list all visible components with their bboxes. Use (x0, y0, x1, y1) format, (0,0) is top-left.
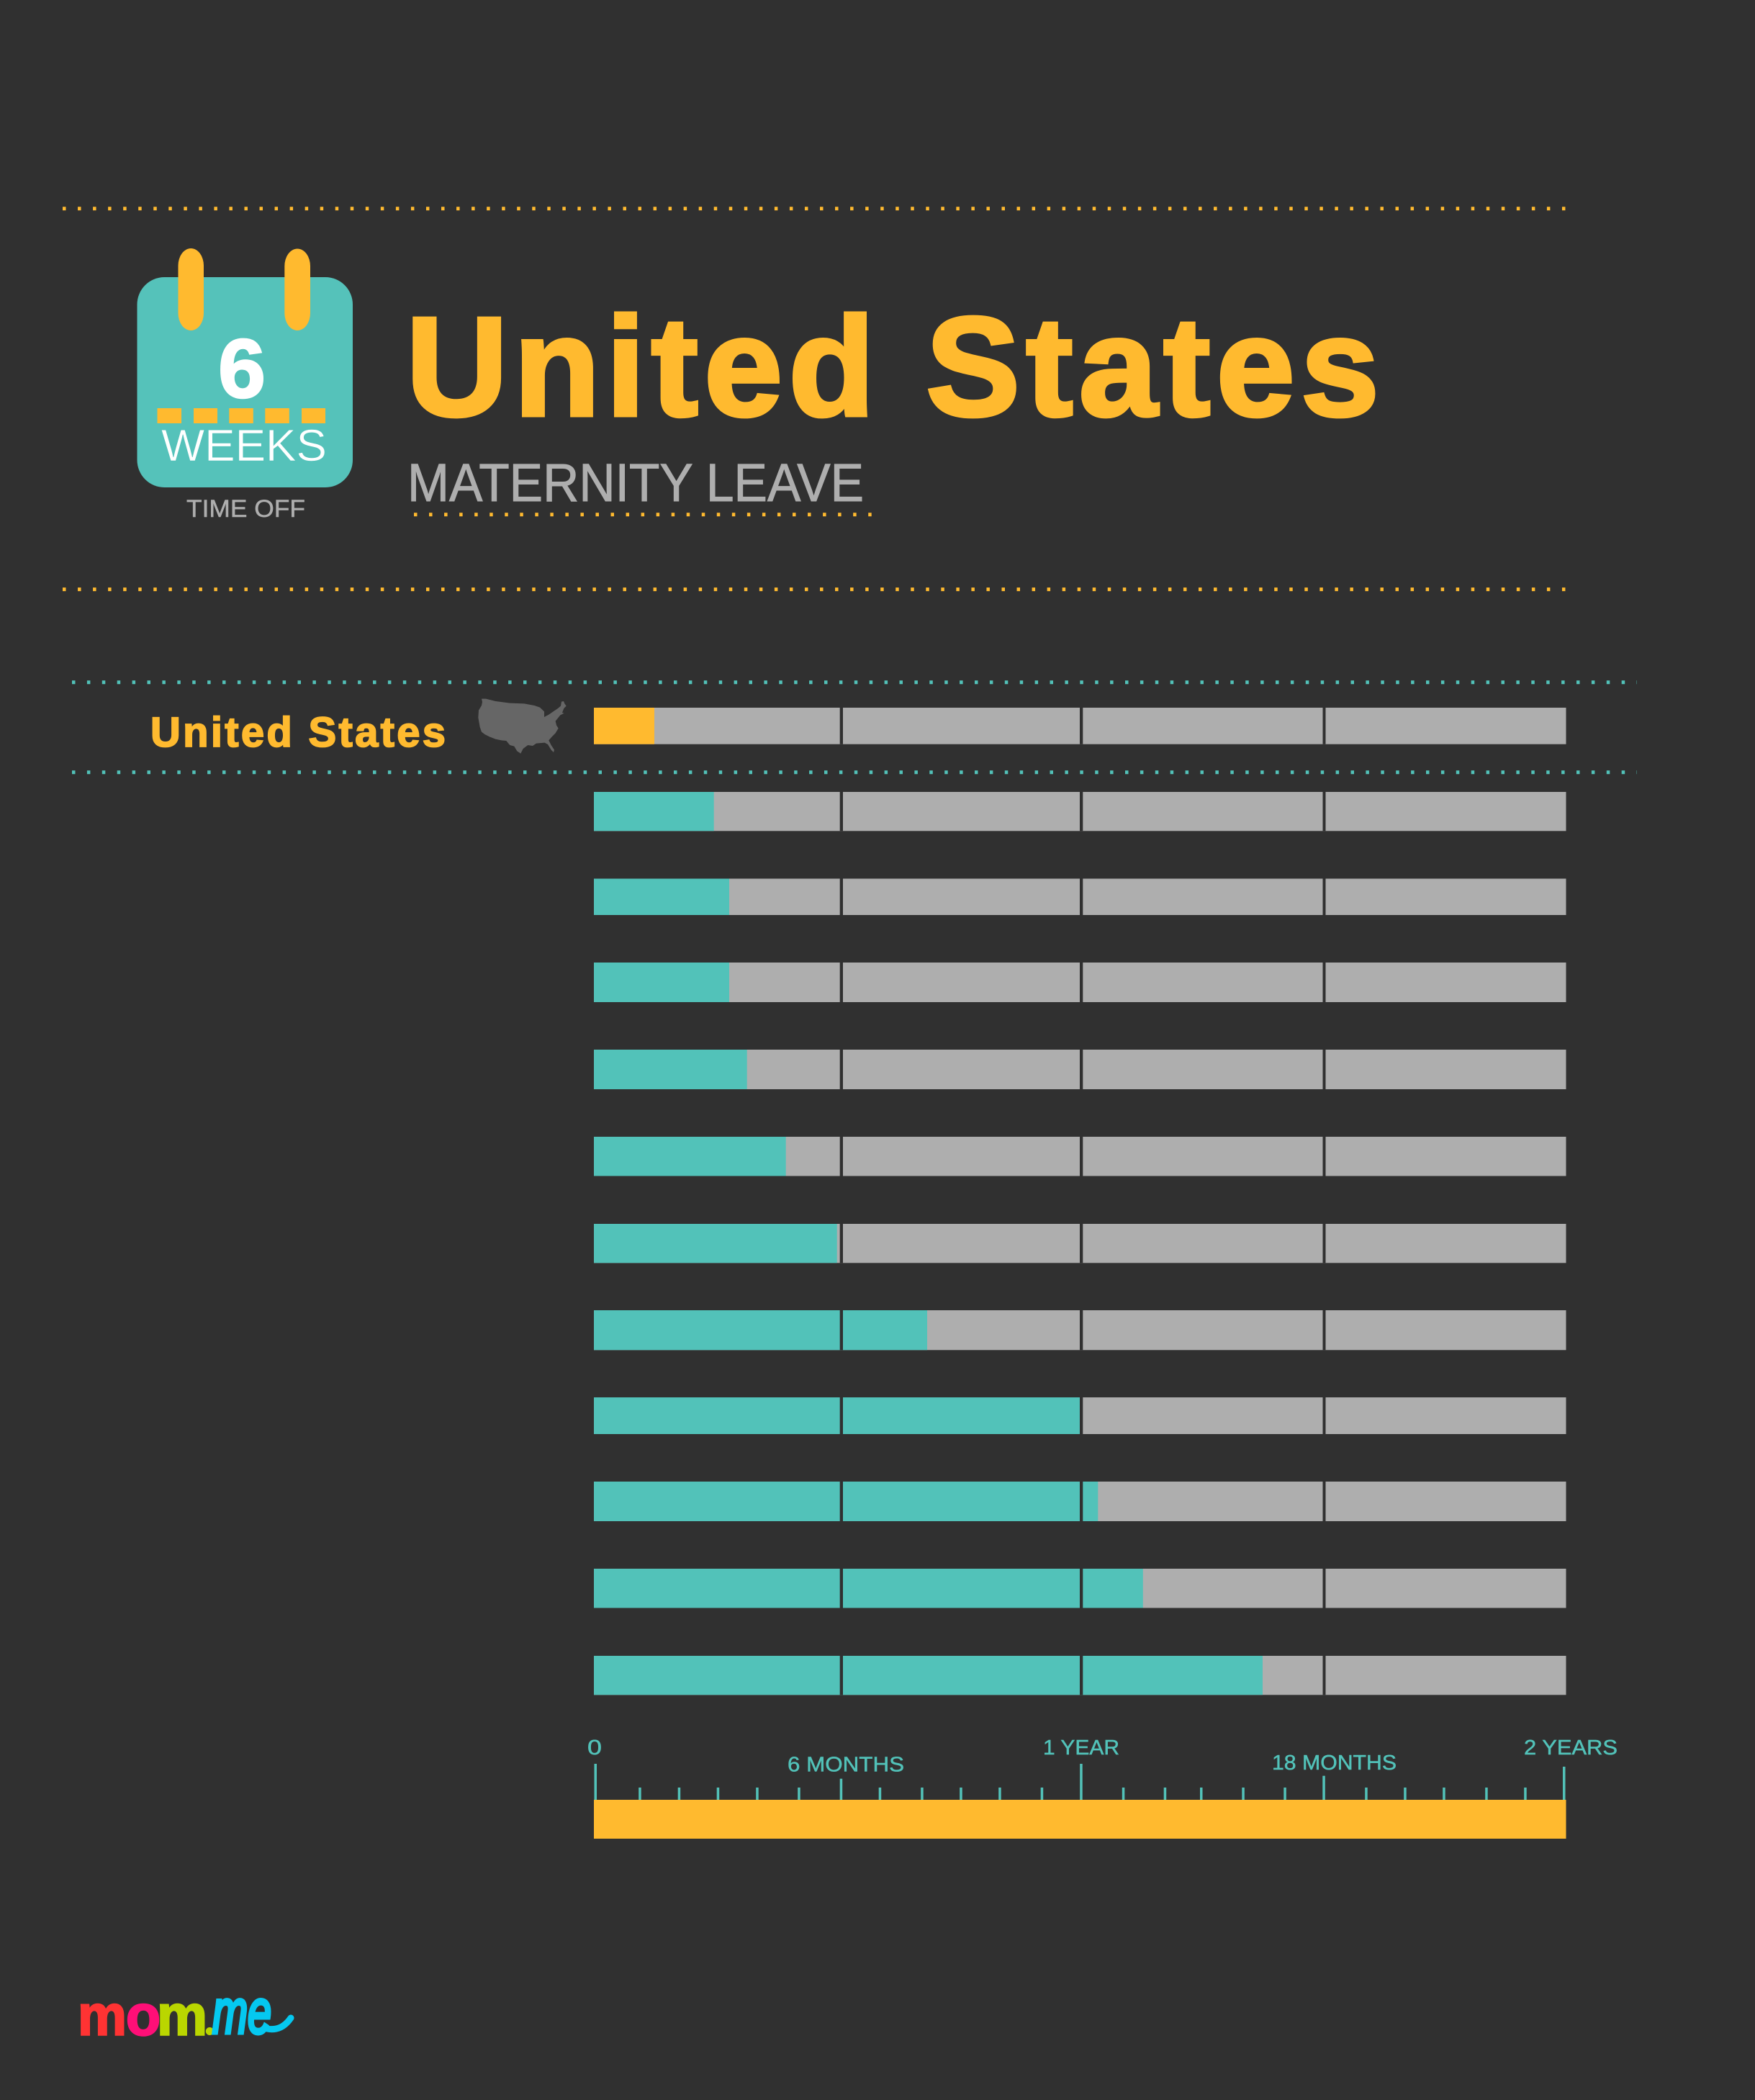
logo: mom.me: me (212, 1978, 271, 2047)
weeks label: WEEKS (161, 421, 327, 471)
subtitle: MATERNITY LEAVE (407, 453, 864, 513)
bar: row 11 (594, 1569, 1566, 1608)
axis label: 0: 0 (587, 1736, 602, 1759)
bar: row 4 (594, 963, 1566, 1002)
bar: row 6 (594, 1137, 1566, 1176)
row label: United States: United States (150, 709, 446, 756)
logo: mom.me: o (126, 1983, 161, 2047)
bar: row 7 (594, 1224, 1566, 1263)
bar: row 5 (594, 1050, 1566, 1089)
axis label: 18 months: 18 MONTHS (1272, 1752, 1397, 1775)
calendar body (137, 277, 353, 487)
bar: United States, 6 weeks (594, 708, 1566, 744)
time off caption: TIME OFF (186, 495, 305, 523)
calendar ring right (284, 249, 310, 330)
icon: calendar showing 6 weeks (137, 248, 353, 487)
axis label: 6 months: 6 MONTHS (788, 1754, 904, 1777)
logo: mom.me (78, 1978, 291, 2047)
bar: row 3 (594, 878, 1566, 915)
number of weeks: 6 (218, 322, 266, 415)
calendar ring left (179, 248, 204, 330)
time axis (587, 1736, 1618, 1839)
bar: row 8 (594, 1310, 1566, 1350)
axis bar (594, 1800, 1566, 1839)
axis label: 2 years: 2 YEARS (1524, 1736, 1618, 1759)
logo: mom.me: m (157, 1983, 207, 2047)
bar: row 10 (594, 1482, 1566, 1521)
logo: mom.me: m (78, 1983, 127, 2047)
bar: row 2 (594, 792, 1566, 831)
bar: row 12 (594, 1656, 1566, 1695)
axis label: 1 year: 1 YEAR (1043, 1736, 1119, 1759)
axis ticks (595, 1764, 1565, 1800)
title: United States (406, 288, 1379, 446)
bar: row 9 (594, 1397, 1566, 1434)
icon: map of the United States (478, 699, 567, 754)
bar chart: paid leave by country (594, 708, 1566, 1695)
dashed yellow row (157, 408, 325, 423)
